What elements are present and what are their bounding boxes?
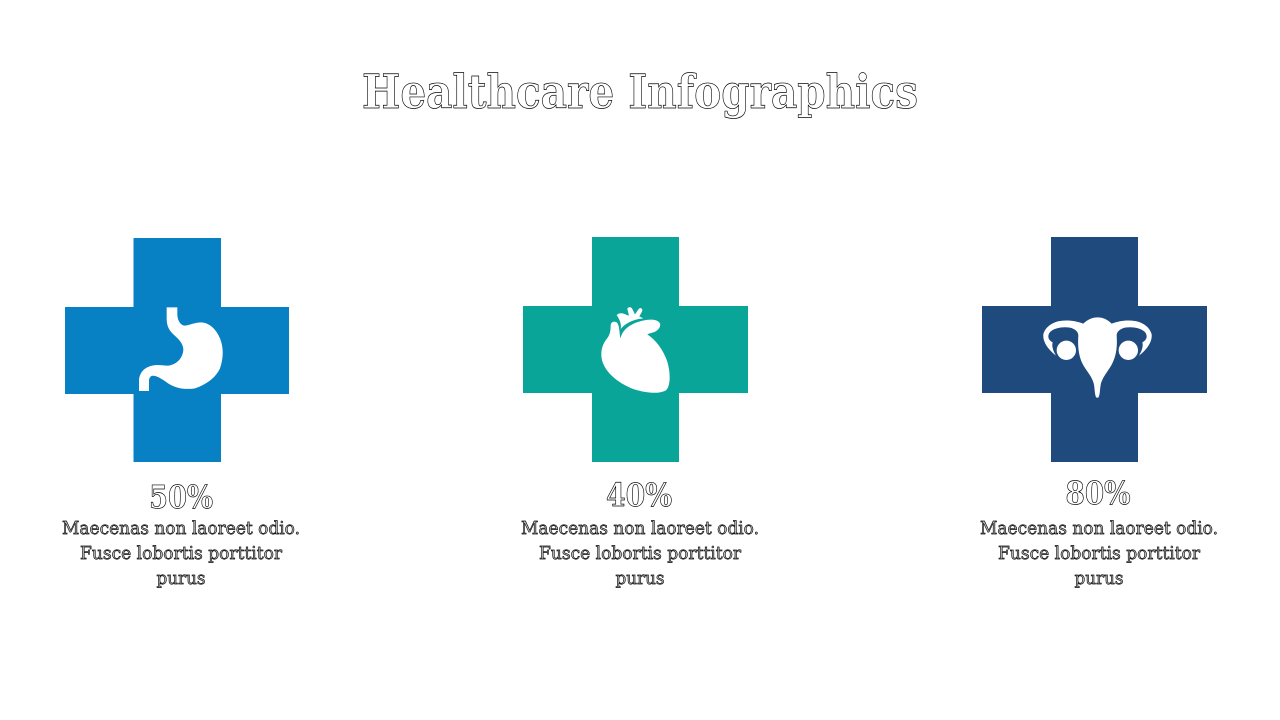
text block: description: Maecenas non laoreet odio. (521, 518, 759, 539)
text block: description: Maecenas non laoreet odio. (62, 518, 300, 539)
text block: description: Fusce lobortis porttitor (80, 543, 282, 564)
text block: description: purus (616, 568, 664, 589)
icon: navy cross (982, 237, 1207, 462)
text block: description: purus (156, 568, 206, 589)
panel: stomach 50% (62, 238, 300, 589)
text block: description: Fusce lobortis porttitor (539, 543, 741, 564)
title: Healthcare Infographics (362, 65, 918, 120)
panel: uterus 80% (980, 237, 1218, 589)
icon: blue cross (65, 238, 289, 462)
icon: teal cross (523, 237, 748, 462)
percentage: 80%: 80% (1066, 474, 1130, 512)
ovary: left (1057, 341, 1076, 360)
icon: stomach (139, 307, 223, 391)
icon: heart (601, 307, 670, 393)
text block: description: Fusce lobortis porttitor (998, 543, 1200, 564)
text block: description (521, 518, 759, 589)
percentage: 50%: 50% (149, 478, 213, 516)
percentage: 40%: 40% (606, 476, 672, 514)
panel: heart 40% (521, 237, 759, 589)
text block: description (62, 518, 300, 589)
text block: description (980, 518, 1218, 589)
ovary: right (1119, 341, 1138, 360)
icon: uterus (1043, 317, 1152, 398)
text block: description: purus (1074, 568, 1124, 589)
text block: description: Maecenas non laoreet odio. (980, 518, 1218, 539)
